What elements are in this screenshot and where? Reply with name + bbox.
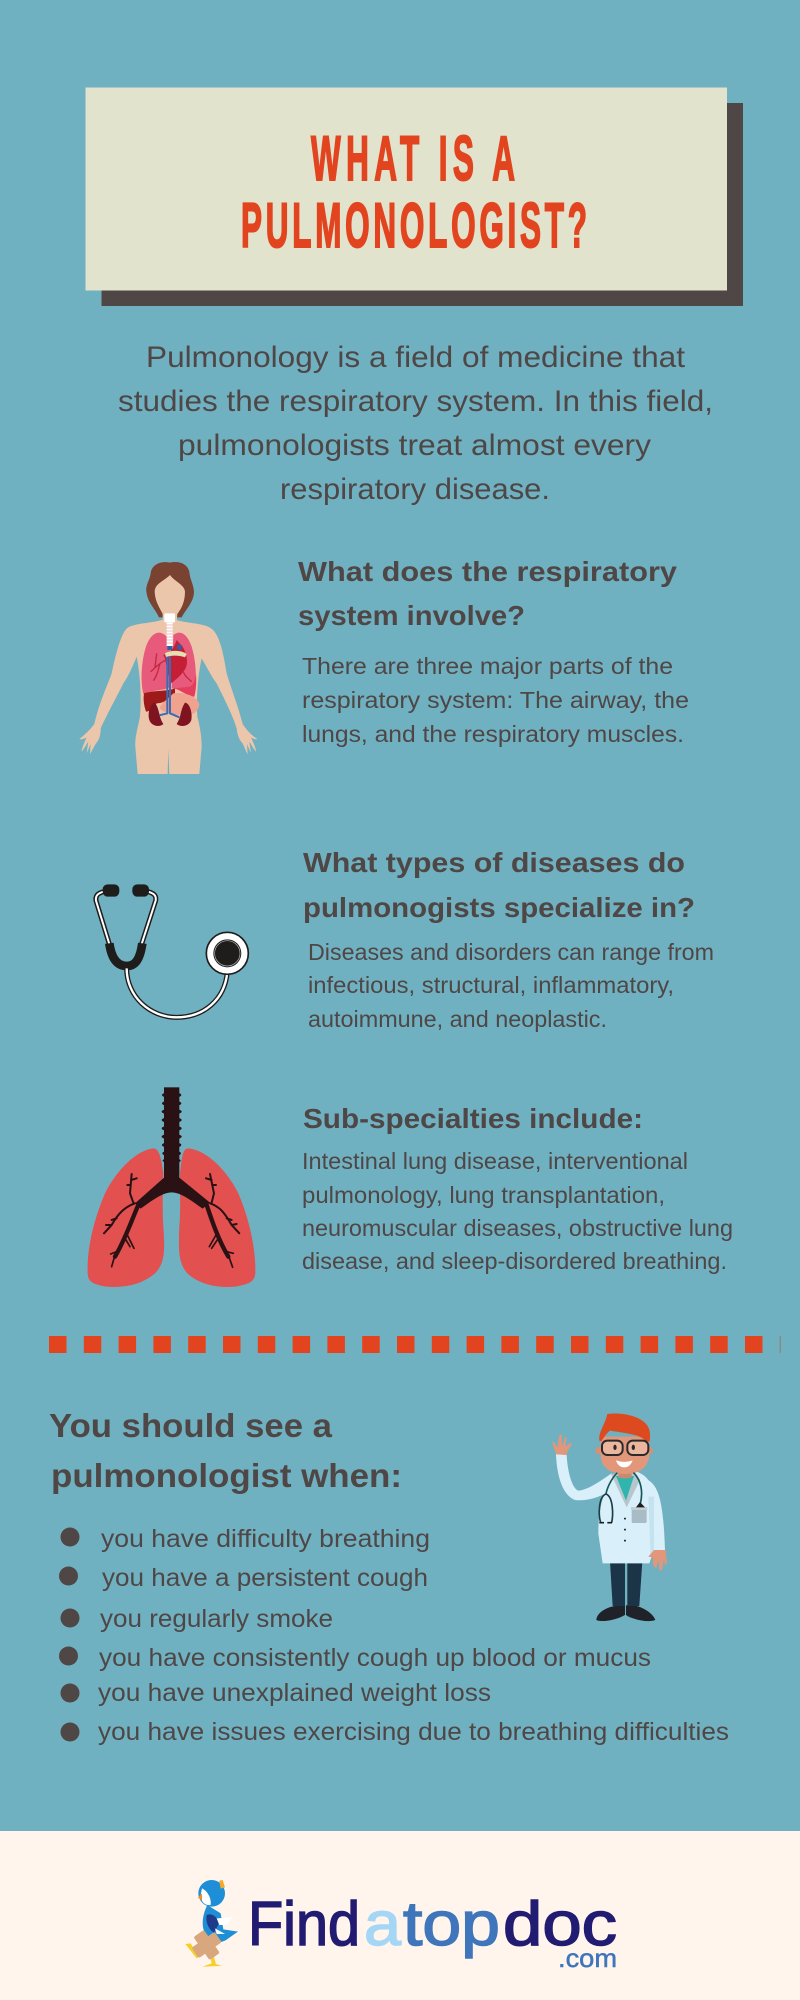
logo wordmark: .com bbox=[558, 1943, 617, 1973]
section 2 text: Diseases and disorders can range from bbox=[308, 939, 714, 965]
title heading bbox=[241, 123, 587, 261]
section 2 heading bbox=[303, 847, 695, 923]
section 3 heading: Sub-specialties include: bbox=[303, 1103, 643, 1134]
logo wordmark: doc bbox=[503, 1890, 617, 1959]
footer band bbox=[0, 1831, 800, 2000]
title heading: PULMONOLOGIST? bbox=[241, 190, 587, 261]
section 3 text bbox=[302, 1148, 733, 1274]
bullet 6: you have issues exercising due to breathing difficulties bbox=[98, 1718, 729, 1746]
logo wordmark: top bbox=[403, 1890, 500, 1959]
section 2 text: autoimmune, and neoplastic. bbox=[308, 1006, 607, 1032]
icon: waving doctor bbox=[552, 1414, 667, 1621]
intro text: Pulmonology is a field of medicine that bbox=[146, 341, 686, 374]
section 2 heading: pulmonogists specialize in? bbox=[303, 892, 695, 923]
logo wordmark bbox=[248, 1890, 617, 1973]
section 3 text: disease, and sleep-disordered breathing. bbox=[302, 1248, 727, 1274]
section 3 text: neuromuscular diseases, obstructive lung bbox=[302, 1215, 733, 1241]
section 1 heading bbox=[298, 556, 677, 631]
bullet 4: you have consistently cough up blood or mucus bbox=[99, 1644, 651, 1672]
dotted divider bbox=[49, 1336, 781, 1353]
section 1 heading: system involve? bbox=[298, 600, 525, 631]
bullet 3: you regularly smoke bbox=[100, 1605, 333, 1633]
section 4 heading bbox=[49, 1407, 402, 1494]
intro text: studies the respiratory system. In this field, bbox=[118, 385, 713, 418]
section 3 text: pulmonology, lung transplantation, bbox=[302, 1182, 665, 1208]
logo wordmark: a bbox=[364, 1890, 402, 1959]
section 3 text: Intestinal lung disease, interventional bbox=[302, 1148, 688, 1174]
section 2 text: infectious, structural, inflammatory, bbox=[308, 972, 674, 998]
bullet 2: you have a persistent cough bbox=[102, 1564, 428, 1592]
logo wordmark: Find bbox=[248, 1890, 360, 1959]
icon: human body with organs bbox=[79, 562, 257, 774]
title panel bbox=[86, 88, 743, 306]
section 4 heading: pulmonologist when: bbox=[51, 1457, 402, 1494]
section 1 heading: What does the respiratory bbox=[298, 556, 677, 587]
section 2 heading: What types of diseases do bbox=[303, 847, 685, 878]
icon: bird mascot bbox=[185, 1880, 238, 1967]
icon: lungs bbox=[88, 1087, 255, 1287]
title heading: WHAT IS A bbox=[311, 123, 515, 194]
section 1 text: respiratory system: The airway, the bbox=[302, 687, 689, 713]
bullet list bbox=[59, 1525, 729, 1746]
bullet 5: you have unexplained weight loss bbox=[98, 1679, 491, 1707]
intro text: respiratory disease. bbox=[280, 473, 550, 506]
section 1 text: lungs, and the respiratory muscles. bbox=[302, 721, 684, 747]
icon: stethoscope bbox=[96, 884, 248, 1017]
section 1 text bbox=[302, 653, 689, 747]
intro text bbox=[118, 341, 713, 506]
intro text: pulmonologists treat almost every bbox=[178, 429, 651, 462]
section 2 text bbox=[308, 939, 714, 1032]
section 1 text: There are three major parts of the bbox=[302, 653, 673, 679]
section 4 heading: You should see a bbox=[49, 1407, 333, 1444]
bullet 1: you have difficulty breathing bbox=[101, 1525, 430, 1553]
